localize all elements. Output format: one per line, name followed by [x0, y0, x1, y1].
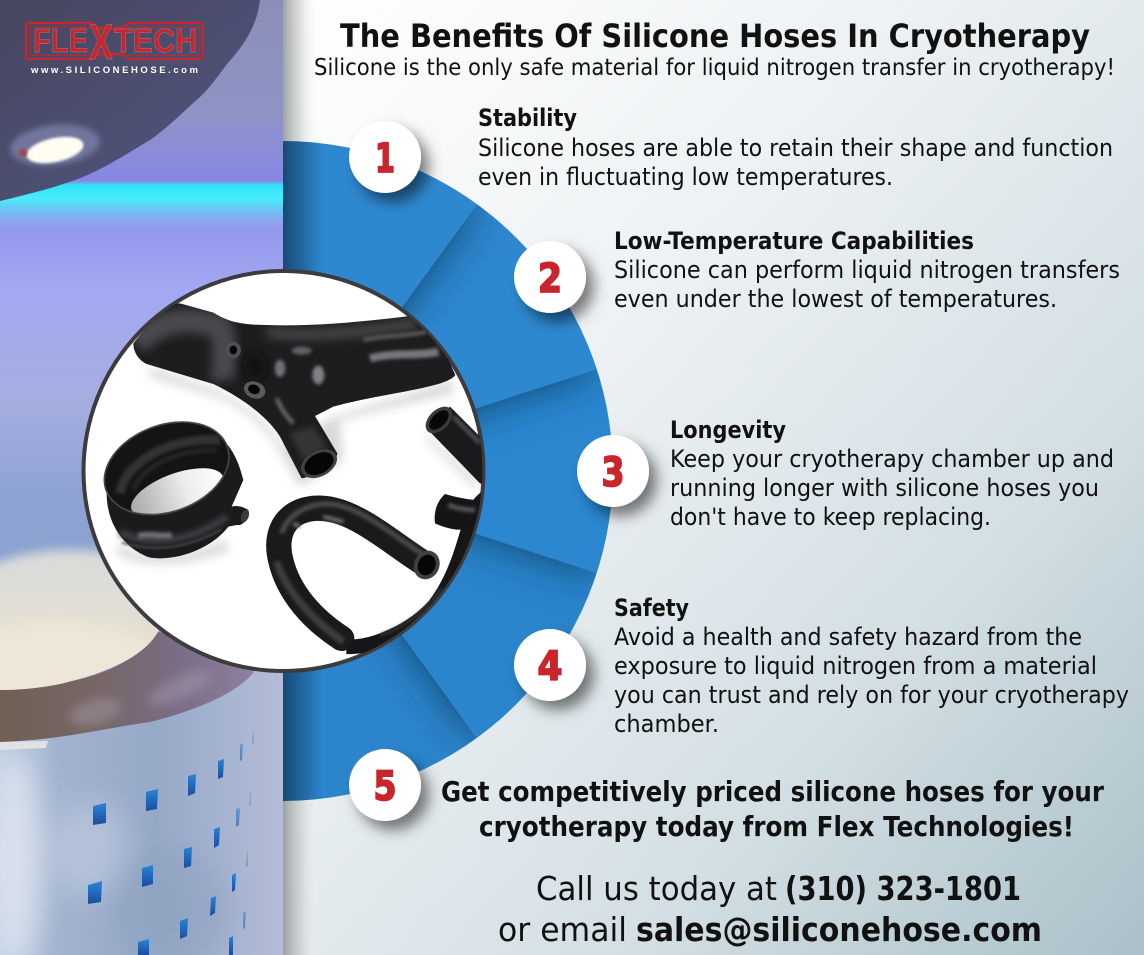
text block: low-temperature capabilities: Silicone can perform liquid nitrogen transfers [614, 256, 1120, 284]
badge 3: 3 [602, 450, 624, 496]
call to action [441, 775, 1104, 843]
contact details [498, 869, 1042, 949]
panel: right background [283, 0, 1144, 955]
text block: longevity: Keep your cryotherapy chamber up and [670, 445, 1114, 473]
text block: safety [614, 594, 1129, 738]
text block: low-temperature capabilities: even under the lowest of temperatures. [614, 285, 1057, 313]
text block: safety: Safety [614, 594, 689, 622]
text block: stability: Stability [478, 104, 577, 132]
text block: safety: exposure to liquid nitrogen from a material [614, 652, 1097, 680]
badge 4 [514, 629, 586, 701]
logo: Flextech [26, 14, 203, 76]
badge 5 [349, 749, 421, 821]
hose: Y-shaped pipe [133, 303, 455, 484]
badge 4: 4 [538, 644, 562, 690]
badge 2: 2 [538, 256, 562, 302]
text block: stability: even in fluctuating low temperatures. [478, 163, 893, 191]
text block: longevity: don't have to keep replacing. [670, 503, 991, 531]
text block: low-temperature capabilities [614, 227, 1120, 313]
ceiling light [8, 120, 102, 170]
text block: low-temperature capabilities: Low-Temperature Capabilities [614, 227, 974, 255]
text block: safety: Avoid a health and safety hazard from the [614, 623, 1082, 651]
logo: Flextech: TECH [114, 22, 197, 59]
hose: right pipe and stub [426, 406, 482, 530]
badge 5: 5 [374, 764, 396, 810]
chamber body [0, 640, 283, 955]
logo: Flextech: X [89, 14, 113, 70]
text block: stability [478, 104, 1113, 191]
cloud of nitrogen vapour [0, 544, 159, 690]
text block: longevity [670, 416, 1114, 531]
logo: Flextech: www.SILICONEHOSE.com [30, 65, 198, 76]
text block: longevity: Longevity [670, 416, 786, 444]
hose: U-bend [277, 498, 485, 647]
badge 2 [514, 241, 586, 313]
panel: cryotherapy chamber photo [0, 0, 283, 955]
call to action: cryotherapy today from Flex Technologies! [479, 810, 1074, 843]
text block: safety: chamber. [614, 710, 719, 738]
logo: Flextech: FLE [33, 22, 88, 59]
badge 1 [349, 121, 421, 193]
hose: ring connector [104, 421, 250, 558]
chamber windows [88, 730, 254, 955]
photo: silicone hoses in circle [84, 271, 497, 671]
chart: blue fan of five segments [283, 141, 613, 801]
badge 3 [577, 435, 649, 507]
contact details: sales@siliconehose.com [636, 910, 1042, 949]
badge 1: 1 [375, 136, 395, 182]
text block: longevity: running longer with silicone hoses you [670, 474, 1099, 502]
dark dome ceiling [0, 0, 260, 201]
hose shadows [117, 367, 477, 564]
chamber rim [0, 632, 253, 742]
contact details: or email [498, 910, 627, 949]
contact details: (310) 323-1801 [785, 869, 1021, 908]
contact details: Call us today at [536, 869, 777, 908]
